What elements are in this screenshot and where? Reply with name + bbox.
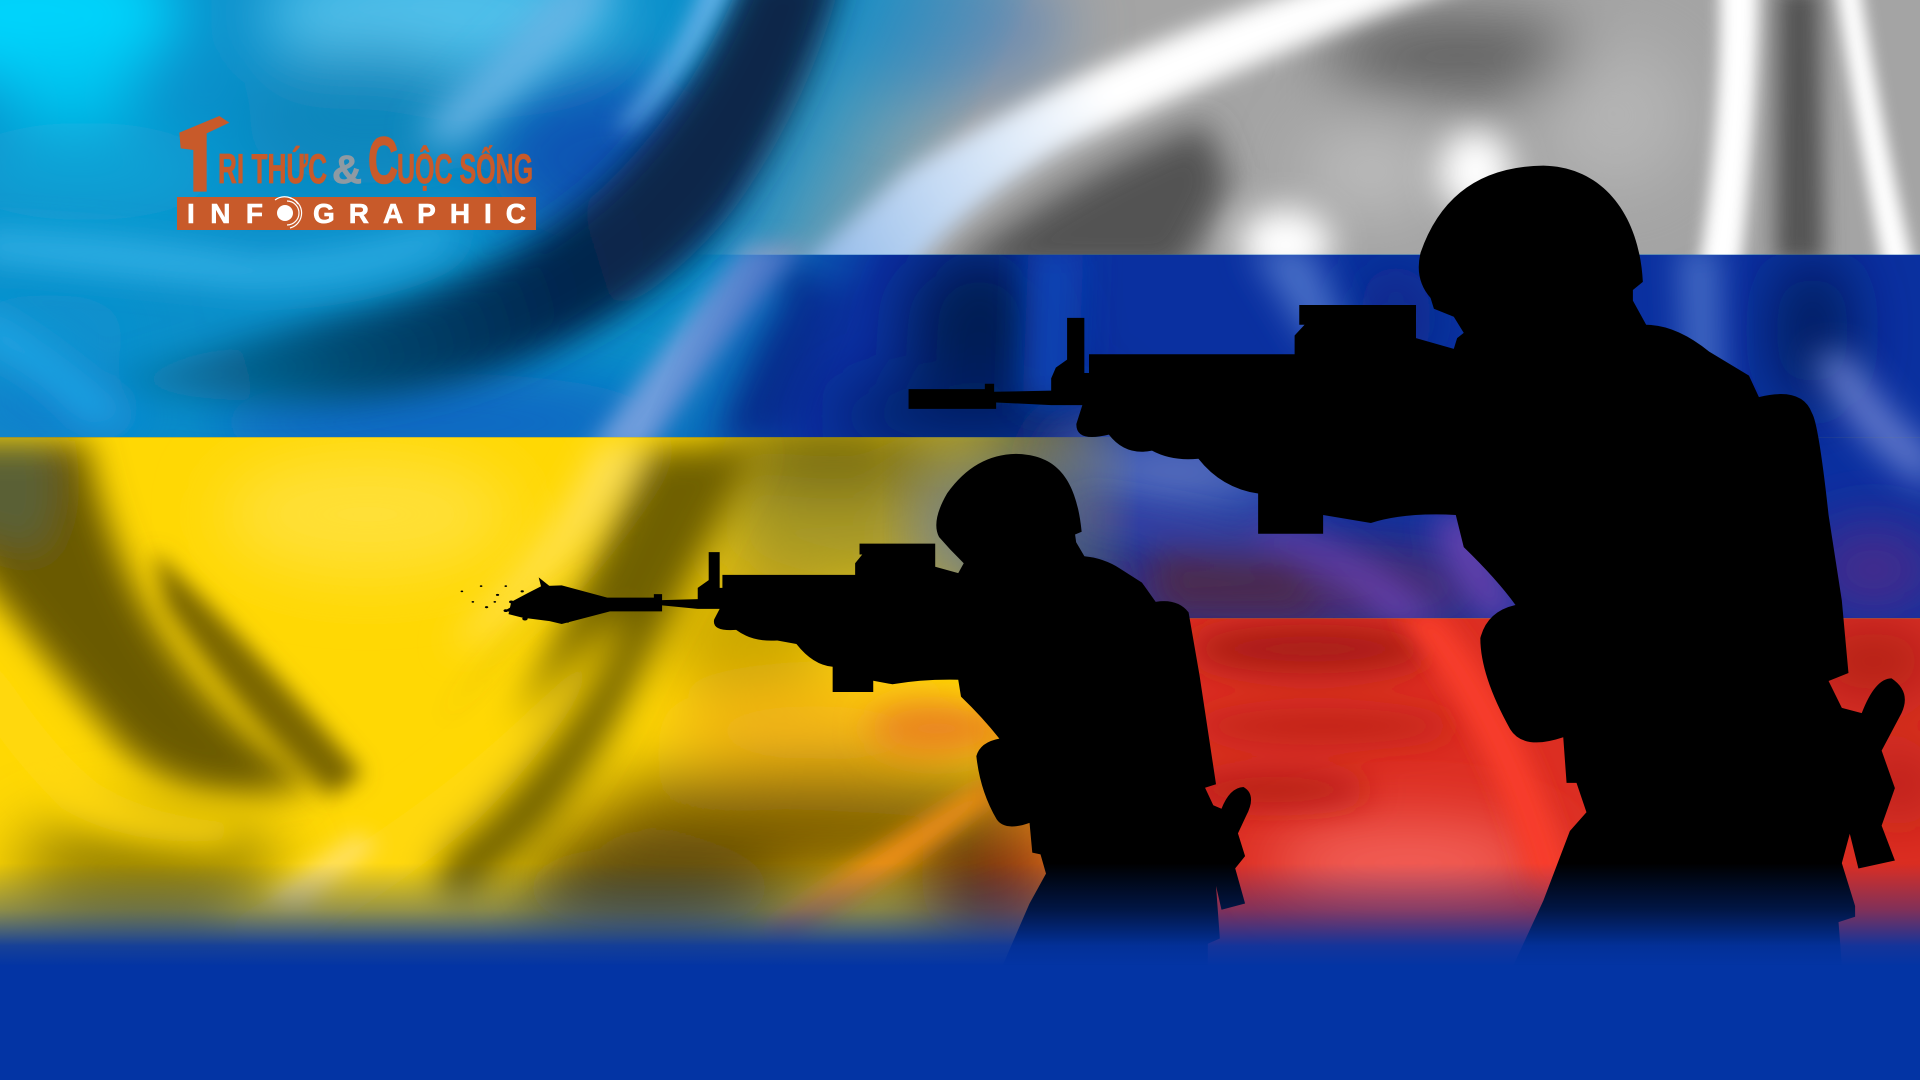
logo large C: C (368, 123, 398, 197)
logo ampersand: & (332, 148, 362, 192)
logo wordmark: uộc sống: UỘC SỐNG (397, 144, 533, 192)
logo orange bar (177, 197, 536, 230)
solid blue footer band (0, 965, 1920, 1080)
Ukraine flag: blue stripe (0, 0, 1920, 471)
logo letter T (179, 116, 229, 192)
logo wordmark: Ri Thức: RI THỨC (218, 144, 327, 192)
logo: Tri Thức & Cuộc Sống Infographic (177, 116, 536, 230)
bottom blue fade over flags and soldiers (0, 863, 1920, 966)
soldier silhouette: small, foreground rifle with muzzle flash (461, 454, 1251, 967)
Russia flag: blue stripe (652, 254, 1920, 618)
logo bar circular O mark (275, 197, 302, 228)
Russia flag: red stripe (980, 618, 1920, 954)
Russia flag: white stripe (706, 0, 1920, 255)
logo bar text: INF: INF (187, 198, 263, 229)
soldier silhouette: large, rear (909, 166, 1905, 965)
muzzle splatter particles (461, 577, 569, 623)
Ukraine flag: yellow stripe (0, 416, 1920, 976)
logo bar text: GRAPHIC: GRAPHIC (313, 198, 526, 229)
